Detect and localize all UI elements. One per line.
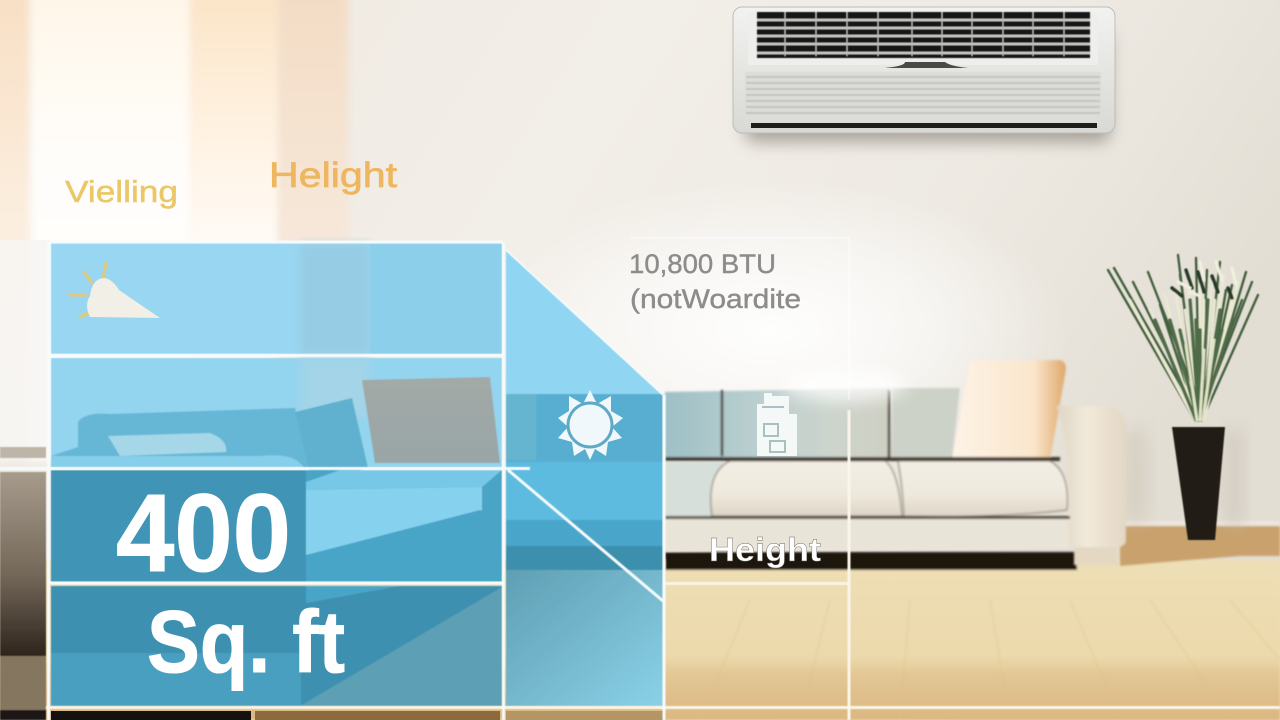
air slot [751,123,1097,128]
sofa seat and dark arm [51,470,502,582]
sofa [665,360,1126,565]
wall shadow beside the sofa [1124,430,1148,522]
louvre [745,72,1101,124]
sofa arm [1056,406,1126,547]
unit: Sq. ft: Sq. ft [147,592,345,691]
mid blue band with sofa back [51,358,502,482]
icon: gear sun [558,390,623,460]
grid lines [0,238,1280,720]
peach pillow [952,360,1066,460]
BTU text block [629,249,801,314]
back cushions [665,388,892,458]
BTU text block: 10,800 BTU [629,249,776,279]
air conditioner unit [733,7,1115,142]
lower blue band [51,586,502,706]
top blue band [51,243,502,354]
shadow of the pot [1224,430,1244,525]
icon: sun behind cloud [70,263,160,318]
panel: blue area overlay [51,243,663,706]
label: Height: Height [709,531,821,568]
BTU text block: (notWoardite [630,284,801,314]
leaves [1108,255,1258,422]
big number: 400: 400 [116,472,291,595]
glow over sofa back [783,369,907,401]
grille [757,12,1090,58]
control handle [885,62,968,68]
icon: building [757,393,797,456]
bottom strip [51,711,663,720]
right blue panel [506,250,663,706]
seat cushions [665,462,725,516]
floor [0,430,1280,720]
plant in pot [1108,255,1258,540]
label: Vielling: Vielling [65,174,178,209]
sofa base [665,519,1069,552]
label: Helight: Helight [269,156,397,195]
pot [1172,427,1225,540]
left dark sofa section [0,447,46,720]
